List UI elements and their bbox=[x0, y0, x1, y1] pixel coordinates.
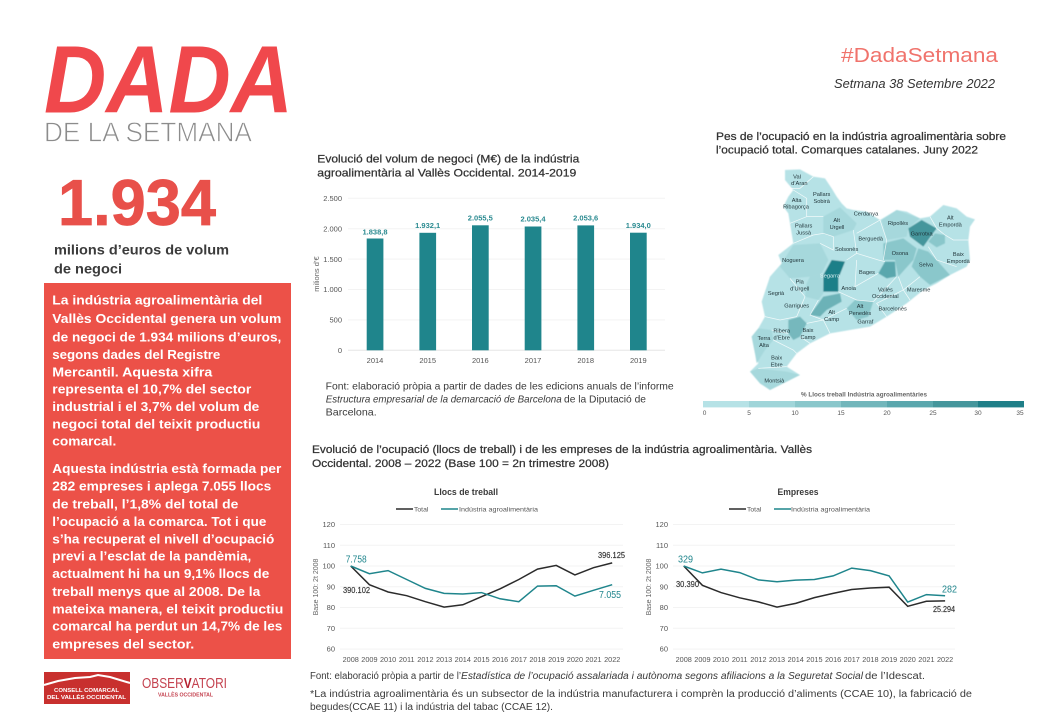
map legend: 30 bbox=[974, 410, 982, 417]
heading: employment charts: Evolució de l’ocupació (llocs de treball) i de les empreses de la indústria agroalimentària. Vallès bbox=[312, 444, 813, 456]
text block: first paragraph: de negoci de 1.934 milions d’euros, bbox=[52, 329, 281, 344]
text block: first paragraph bbox=[52, 293, 281, 449]
line chart: Llocs de treball: 70 bbox=[327, 624, 335, 633]
map labels: Segarra bbox=[820, 274, 841, 280]
line chart: Empreses: 2021 bbox=[918, 655, 935, 664]
map labels bbox=[758, 174, 971, 384]
map labels: Maresme bbox=[907, 287, 930, 293]
bar values bbox=[362, 214, 651, 236]
line chart: Llocs de treball: 396.125 bbox=[598, 551, 626, 560]
logo: Consell Comarcal: CONSELL COMARCAL bbox=[54, 688, 120, 694]
text block: second paragraph: previ a l’esclat de la pandèmia, bbox=[52, 549, 251, 564]
map labels: Camp bbox=[824, 317, 839, 323]
line chart: Llocs de treball: 120 bbox=[322, 520, 335, 529]
y axis labels: 0 bbox=[338, 346, 342, 355]
bar values: 1.838,8 bbox=[362, 228, 388, 236]
line chart: Empreses: 2018 bbox=[862, 655, 879, 664]
map labels: Occidental bbox=[872, 294, 899, 300]
text block: first paragraph: segons dades del Registre bbox=[52, 347, 220, 362]
map labels: Vallès bbox=[878, 287, 893, 293]
line chart: Llocs de treball: 2018 bbox=[529, 655, 546, 664]
map labels: Alta bbox=[759, 343, 770, 349]
line chart: Empreses: 2019 bbox=[881, 655, 897, 664]
line chart: Llocs de treball: 80 bbox=[327, 603, 335, 612]
map legend: 35 bbox=[1016, 410, 1024, 417]
map labels: Garrotxa bbox=[911, 232, 934, 238]
map labels: Bages bbox=[859, 270, 875, 276]
legend bbox=[396, 506, 538, 514]
bar chart: business volume bbox=[312, 194, 665, 365]
x axis labels: 2019 bbox=[630, 356, 647, 365]
text block: second paragraph: actualment hi ha un 9,1% llocs de bbox=[52, 566, 269, 581]
footer source and note: de l’Idescat. bbox=[865, 671, 925, 682]
text block: first paragraph: negoci total del teixit productiu bbox=[52, 417, 260, 432]
map labels: Osona bbox=[892, 251, 909, 257]
x axis labels: 2017 bbox=[525, 356, 541, 365]
map labels: Empordà bbox=[947, 259, 971, 265]
key figure: 1.934: milions d’euros de volum bbox=[54, 241, 229, 257]
logo: Consell Comarcal bbox=[44, 672, 130, 704]
line chart: Llocs de treball: 2017 bbox=[511, 655, 527, 664]
text block: second paragraph: treball menys que al 2008. De la bbox=[52, 584, 261, 599]
line chart: Llocs de treball: 2016 bbox=[492, 655, 508, 664]
x axis labels bbox=[367, 356, 647, 365]
footer source and note: *La indústria agroalimentària és un subsector de la indústria manufacturera i comprèn la producció d’aliments (CCAE 10), la fabricació de bbox=[310, 689, 972, 700]
line chart: Llocs de treball: 2022 bbox=[604, 655, 620, 664]
line chart: Llocs de treball: 110 bbox=[323, 541, 335, 550]
heading: employment charts bbox=[312, 444, 813, 470]
map labels: Berguedà bbox=[858, 237, 884, 243]
line chart: Empreses: 70 bbox=[660, 624, 668, 633]
line chart: Llocs de treball: 2008 bbox=[343, 655, 359, 664]
text block: first paragraph: La indústria agroalimentària del bbox=[52, 293, 262, 308]
map labels: Empordà bbox=[939, 222, 963, 228]
bar values: 2.055,5 bbox=[468, 214, 493, 222]
line chart: Llocs de treball: 2021 bbox=[585, 655, 602, 664]
heading: map bbox=[716, 131, 1006, 156]
map legend: 15 bbox=[837, 410, 845, 417]
line chart: Empreses: 2012 bbox=[750, 655, 767, 664]
map labels: Baix bbox=[953, 252, 964, 258]
footer source and note: Font: elaboració pròpia a partir de l’ bbox=[310, 671, 461, 682]
map labels: Baix bbox=[771, 355, 782, 361]
key figure: 1.934 bbox=[54, 166, 229, 276]
map labels: Alta bbox=[792, 198, 802, 204]
map labels: Noguera bbox=[782, 258, 805, 264]
map labels: Montsià bbox=[764, 378, 785, 384]
text block: second paragraph: s’ha recuperat el nivell d’ocupació bbox=[52, 531, 274, 546]
map labels: Sobirà bbox=[813, 199, 831, 205]
map labels: Pallars bbox=[813, 192, 830, 198]
line chart: Llocs de treball: 390.102 bbox=[343, 586, 371, 595]
map legend: 25 bbox=[929, 410, 937, 417]
line chart: Llocs de treball: 2019 bbox=[548, 655, 564, 664]
heading: business volume chart: Evolució del volum de negoci (M€) de la indústria bbox=[317, 153, 580, 165]
line chart: Empreses: 100 bbox=[655, 562, 668, 570]
text block: first paragraph: comarcal. bbox=[52, 434, 116, 449]
heading: map: l’ocupació total. Comarques catalanes. Juny 2022 bbox=[716, 144, 978, 156]
bar values: 2.035,4 bbox=[520, 214, 546, 224]
line chart: Llocs de treball: 2015 bbox=[473, 655, 490, 664]
y axis labels: 500 bbox=[329, 316, 342, 325]
map labels: d’Urgell bbox=[790, 286, 809, 292]
line chart: Llocs de treball: 7.055 bbox=[599, 590, 621, 601]
text block: first paragraph: representa el 10,7% del sector bbox=[52, 382, 251, 397]
line chart: Llocs de treball: 2020 bbox=[567, 655, 583, 664]
line chart: Llocs de treball: 2010 bbox=[380, 655, 396, 664]
source note: bar chart: de la Diputació de bbox=[564, 394, 646, 405]
source note: bar chart: Barcelona. bbox=[326, 408, 377, 419]
line chart: Empreses: Empreses bbox=[778, 487, 818, 497]
text block: second paragraph: de treball, l’1,8% del total de bbox=[52, 496, 238, 511]
legend: Indústria agroalimentària bbox=[791, 506, 870, 514]
heading: employment charts: Occidental. 2008 – 2022 (Base 100 = 2n trimestre 2008) bbox=[312, 458, 609, 470]
text block: second paragraph: l’ocupació a la comarca. Tot i que bbox=[52, 514, 266, 529]
x axis labels: 2018 bbox=[577, 356, 594, 365]
map labels: Alt bbox=[833, 218, 840, 224]
text block: first paragraph: Vallès Occidental genera un volum bbox=[52, 311, 281, 326]
map labels: Cerdanya bbox=[854, 211, 879, 217]
map labels: Pallars bbox=[795, 223, 812, 229]
text block: second paragraph: Aquesta indústria està formada per bbox=[52, 461, 281, 476]
map labels: Barcelonès bbox=[879, 306, 907, 312]
y axis labels: 1.500 bbox=[323, 255, 342, 264]
map legend: 0 bbox=[703, 410, 707, 417]
line chart: Empreses: 25.294 bbox=[933, 605, 955, 614]
line chart: Empreses bbox=[646, 487, 957, 664]
map labels: Solsonès bbox=[835, 247, 858, 253]
line chart: Llocs de treball: 60 bbox=[327, 645, 335, 654]
map labels: Anoia bbox=[841, 286, 857, 292]
line chart: Empreses: 2015 bbox=[806, 655, 823, 664]
line chart: Llocs de treball: 2012 bbox=[417, 655, 434, 664]
map labels: Urgell bbox=[830, 225, 844, 231]
map labels: Ribagorça bbox=[783, 205, 810, 211]
text block: second paragraph bbox=[52, 461, 283, 651]
hashtag and date: #DadaSetmana bbox=[841, 45, 999, 67]
line chart: Empreses: 329 bbox=[678, 554, 693, 566]
line chart: Empreses: 2009 bbox=[694, 655, 711, 664]
map labels: Alt bbox=[828, 310, 835, 316]
legend bbox=[729, 506, 870, 514]
line chart: Empreses: 60 bbox=[660, 645, 668, 654]
line chart: Empreses: 282 bbox=[942, 585, 957, 596]
title: DADA de la setmana: DE LA SETMANA bbox=[44, 117, 253, 148]
map labels: Garraf bbox=[857, 320, 874, 326]
heading: business volume chart bbox=[317, 153, 580, 180]
text block: second paragraph: mateixa manera, el teixit productiu bbox=[52, 601, 283, 616]
line chart: Llocs de treball: 7.758 bbox=[346, 554, 367, 566]
line chart: Empreses: 30.390 bbox=[676, 580, 700, 589]
line chart: Empreses: 2020 bbox=[900, 655, 916, 664]
map labels: Val bbox=[793, 174, 801, 180]
text block: first paragraph: industrial i el 3,7% del volum de bbox=[52, 399, 259, 414]
x axis labels: 2015 bbox=[419, 356, 436, 365]
y axis labels bbox=[323, 194, 342, 355]
line chart: Llocs de treball: 100 bbox=[322, 562, 335, 570]
line chart: Llocs de treball: Base 100: 2t 2008 bbox=[313, 558, 320, 615]
map labels: Ebre bbox=[771, 362, 783, 368]
panel: summary text bbox=[44, 283, 291, 659]
bar values: 2.053,6 bbox=[573, 214, 598, 222]
map labels: Alt bbox=[947, 215, 954, 221]
line chart: Empreses: 80 bbox=[660, 603, 668, 612]
line chart: Empreses: 120 bbox=[655, 520, 668, 529]
line chart: Llocs de treball: 2014 bbox=[455, 655, 471, 664]
text block: second paragraph: empreses del sector. bbox=[52, 636, 194, 651]
map labels: Baix bbox=[802, 328, 814, 334]
map legend: % Llocs treball Indústria agroalimentàries bbox=[801, 392, 927, 399]
line chart: Empreses: 2016 bbox=[825, 655, 841, 664]
y axis title: milions d’€ bbox=[312, 255, 321, 292]
map labels: d’Aran bbox=[791, 181, 808, 187]
heading: business volume chart: agroalimentària al Vallès Occidental. 2014-2019 bbox=[317, 168, 576, 180]
key figure: 1.934: de negoci bbox=[54, 260, 122, 276]
source note: bar chart bbox=[326, 381, 674, 419]
choropleth map: Catalonia bbox=[750, 169, 975, 390]
footer source and note: Estadística de l’ocupació assalariada i autònoma segons afiliacions a la Seguretat Social bbox=[461, 671, 864, 682]
line chart: Llocs de treball: Llocs de treball bbox=[434, 487, 498, 497]
map labels: Ribera bbox=[773, 329, 791, 335]
y axis labels: 1.000 bbox=[323, 285, 342, 294]
line chart: Empreses: 2022 bbox=[937, 655, 953, 664]
map labels: Penedès bbox=[849, 311, 871, 317]
map labels: Pla bbox=[796, 279, 805, 285]
map labels: Garrigues bbox=[784, 303, 809, 309]
line chart: Llocs de treball: 2009 bbox=[361, 655, 378, 664]
footer source and note bbox=[310, 671, 972, 713]
line chart: Empreses: 2008 bbox=[676, 655, 692, 664]
x axis labels: 2016 bbox=[472, 356, 489, 365]
map labels: Terra bbox=[758, 336, 771, 342]
map labels: Ripollès bbox=[888, 221, 908, 227]
map legend: 5 bbox=[747, 410, 751, 417]
heading: map: Pes de l’ocupació en la indústria agroalimentària sobre bbox=[716, 131, 1006, 143]
text block: second paragraph: comarcal ha perdut un 14,7% de les bbox=[52, 619, 282, 634]
logo: Consell Comarcal: DEL VALLÈS OCCIDENTAL bbox=[47, 693, 127, 701]
logo: Observatori: OBSERVATORI bbox=[142, 675, 227, 692]
line chart: Empreses: 2010 bbox=[713, 655, 729, 664]
map labels: Jussà bbox=[796, 230, 812, 236]
hashtag and date: Setmana 38 Setembre 2022 bbox=[834, 76, 996, 91]
line chart: Empreses: 2011 bbox=[732, 655, 748, 664]
line chart: Empreses: 110 bbox=[656, 541, 668, 550]
line chart: Empreses: 2013 bbox=[769, 655, 785, 664]
map labels: Alt bbox=[857, 304, 864, 310]
map legend: 10 bbox=[791, 410, 799, 417]
hashtag and date bbox=[834, 45, 999, 91]
bar values: 1.932,1 bbox=[415, 221, 440, 230]
logo: Observatori: VALLÈS OCCIDENTAL bbox=[158, 691, 213, 699]
legend: Total bbox=[747, 506, 762, 514]
line chart: Empreses: 2017 bbox=[844, 655, 860, 664]
map legend: 20 bbox=[883, 410, 891, 417]
map labels: Segrià bbox=[768, 291, 785, 297]
line chart: Empreses: 90 bbox=[660, 582, 668, 591]
line chart: Llocs de treball: 2013 bbox=[436, 655, 452, 664]
x axis labels: 2014 bbox=[367, 356, 383, 365]
title: DADA de la setmana: DADA bbox=[44, 27, 293, 134]
line chart: Llocs de treball: 90 bbox=[327, 582, 335, 591]
bars bbox=[367, 225, 647, 350]
legend: Indústria agroalimentària bbox=[459, 506, 538, 514]
footer source and note: begudes(CCAE 11) i la indústria del tabac (CCAE 12). bbox=[310, 702, 553, 713]
source note: bar chart: Font: elaboració pròpia a partir de dades de les edicions anuals de l’informe bbox=[326, 381, 674, 392]
key figure: 1.934: 1.934 bbox=[58, 166, 216, 239]
y axis labels: 2.500 bbox=[323, 194, 342, 203]
line chart: Empreses: 2014 bbox=[788, 655, 804, 664]
y axis labels: 2.000 bbox=[323, 224, 342, 233]
text block: second paragraph: 282 empreses i aplega 7.055 llocs bbox=[52, 479, 271, 494]
line chart: Empreses: Base 100: 2t 2008 bbox=[646, 558, 653, 615]
line chart: Llocs de treball bbox=[313, 487, 626, 664]
map labels: Camp bbox=[800, 335, 816, 341]
logo: Observatori bbox=[142, 675, 227, 699]
map labels: d’Ebre bbox=[773, 336, 790, 342]
line chart: Llocs de treball: 2011 bbox=[399, 655, 415, 664]
map legend bbox=[703, 392, 1024, 417]
legend: Total bbox=[414, 506, 429, 514]
bar values: 1.934,0 bbox=[626, 221, 651, 230]
map labels: Selva bbox=[919, 263, 934, 269]
source note: bar chart: Estructura empresarial de la demarcació de Barcelona bbox=[326, 394, 562, 405]
text block: first paragraph: Mercantil. Aquesta xifra bbox=[52, 364, 213, 379]
